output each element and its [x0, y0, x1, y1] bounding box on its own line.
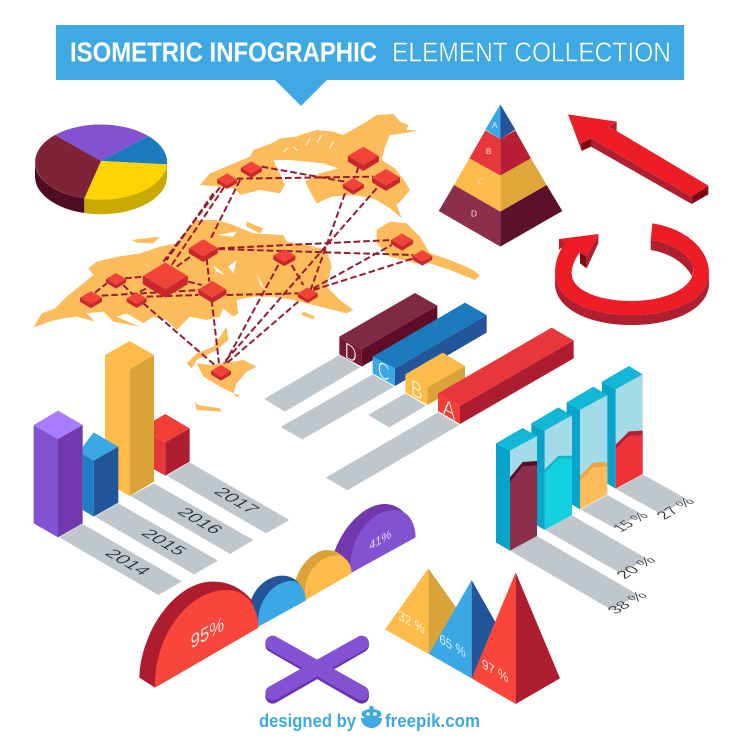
percent panels chart [496, 366, 699, 617]
bar B [405, 353, 465, 406]
pyramid labels: B [486, 146, 492, 156]
percent labels: 15 % [610, 510, 653, 535]
footer credit: freepik.com [385, 711, 480, 731]
icon: purple cross [273, 643, 362, 696]
triangle 65% [429, 580, 513, 678]
world map with network [33, 114, 480, 412]
percent labels: 20 % [613, 554, 660, 581]
bar B: B [411, 373, 423, 406]
dome 95%: 95% [191, 614, 224, 654]
pyramid labels [471, 120, 498, 219]
pyramid chart [439, 104, 562, 247]
title banner [56, 25, 684, 106]
dome 41% [334, 504, 416, 573]
year labels: 2016 [173, 505, 228, 537]
triangle 97%: 97 % [482, 656, 508, 686]
semicircle chart [139, 504, 416, 688]
bar strips [264, 355, 459, 490]
bar D [339, 293, 437, 369]
panel 15% [567, 387, 607, 509]
network dashed lines [95, 167, 413, 367]
pyramid labels: C [478, 177, 484, 187]
year labels: 2015 [137, 526, 192, 558]
column 2015 [83, 432, 118, 517]
pyramid labels: D [471, 209, 477, 219]
footer credit [259, 706, 480, 731]
year labels [100, 484, 265, 578]
icon: freepik mascot [361, 706, 382, 728]
network nodes [80, 147, 432, 381]
percent labels [604, 495, 699, 617]
pyramid labels: A [492, 120, 498, 130]
panel 20% [531, 407, 572, 530]
dome 41%: 41% [369, 527, 391, 553]
triangle 97% [472, 572, 560, 704]
bar D: D [345, 336, 357, 369]
panel 38% [496, 428, 537, 551]
panel 27% [602, 366, 643, 489]
dome blue [251, 576, 306, 627]
column 2016 [105, 341, 154, 496]
percent strips [510, 474, 687, 610]
triangle 32% [385, 568, 472, 654]
icon: straight arrow [568, 114, 708, 204]
column 2017 [154, 414, 190, 476]
icon: circular arrow [555, 223, 709, 325]
year labels: 2014 [100, 546, 156, 578]
bar C [373, 303, 487, 387]
map: north america [200, 114, 418, 218]
percent labels: 27 % [653, 495, 699, 522]
title text: bold part: ISOMETRIC INFOGRAPHIC [70, 36, 377, 68]
year strips [59, 462, 289, 595]
map: south america [377, 222, 480, 280]
map: eurasia and africa [33, 220, 353, 330]
triangle chart [385, 568, 560, 704]
dome yellow [295, 550, 352, 600]
bar A [438, 328, 574, 426]
footer credit: designed by [259, 711, 356, 731]
3D column chart by year [34, 341, 289, 595]
triangle 32%: 32 % [398, 607, 425, 637]
horizontal bar chart A to D [264, 293, 574, 490]
pie chart [35, 124, 167, 214]
bar C: C [378, 354, 390, 387]
title text: light part: ELEMENT COLLECTION [392, 36, 671, 68]
percent labels: 38 % [604, 589, 651, 617]
triangle 65%: 65 % [439, 631, 466, 661]
dome 95% [139, 582, 258, 688]
column 2014 [34, 411, 83, 537]
map: australia and islands [132, 222, 315, 412]
bar A: A [443, 392, 456, 426]
year labels: 2017 [209, 484, 265, 516]
